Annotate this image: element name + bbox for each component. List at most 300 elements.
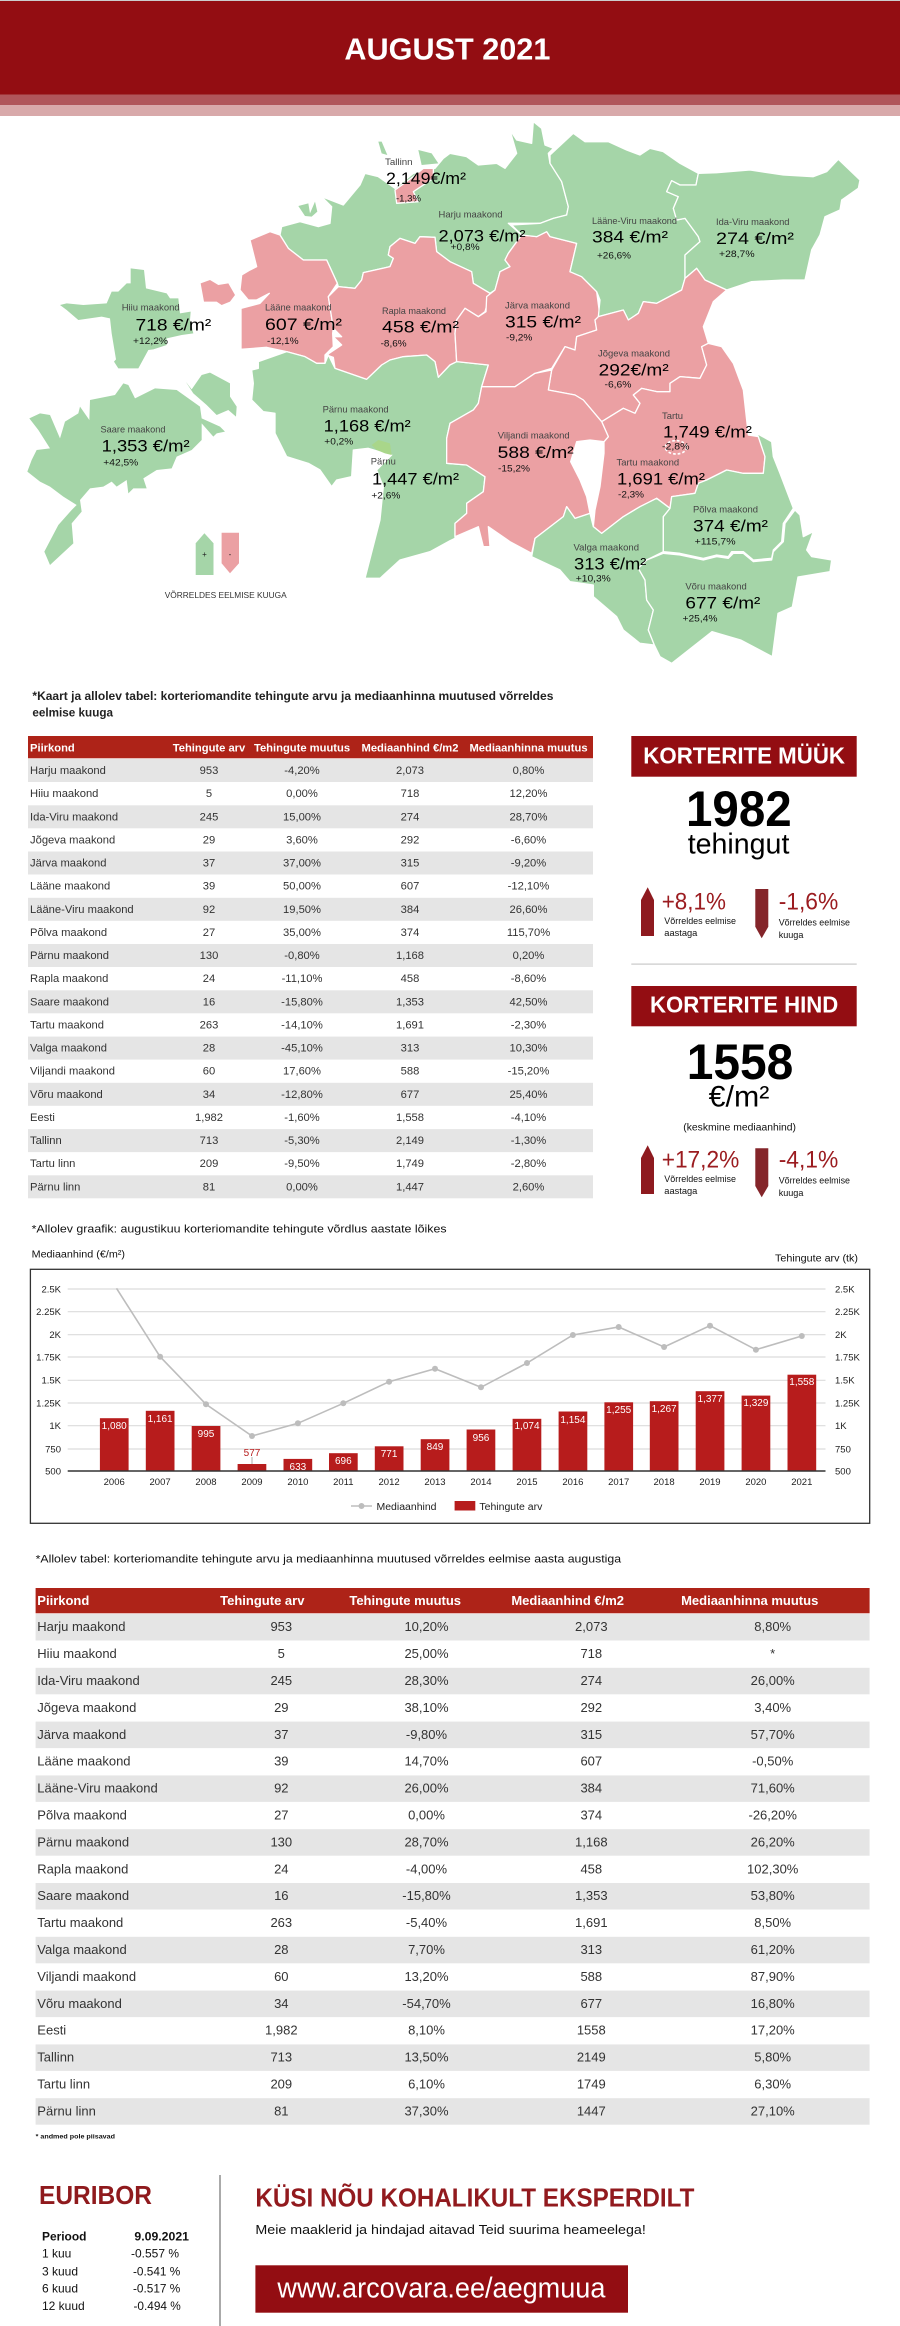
label: Tallinn xyxy=(385,157,466,205)
button: website xyxy=(255,2265,628,2313)
row: Harju: 2,073 xyxy=(575,1619,608,1634)
region: Tallinn xyxy=(395,168,433,203)
row: Rapla: 458 xyxy=(580,1861,602,1876)
row: Pärnu xyxy=(28,944,593,967)
chart legend: Tehingute arv xyxy=(479,1502,542,1513)
label: Põlva xyxy=(693,505,768,547)
table header: Mediaanhind €/m2 xyxy=(511,1593,624,1608)
region: Lääne maakond xyxy=(240,232,337,363)
row: Lääne-Viru: 71,60% xyxy=(751,1781,795,1796)
row: Hiiu: 718 xyxy=(580,1646,602,1661)
row: Järva xyxy=(28,852,593,874)
heading: korterite hind xyxy=(631,986,857,1026)
row: Ida-Viru: 245 xyxy=(270,1673,292,1688)
row: Viljandi xyxy=(37,1969,795,1984)
row: Tartu: 8,50% xyxy=(754,1915,792,1930)
table header: Tehingute arv xyxy=(220,1593,305,1608)
row: Tartu linn: 6,30% xyxy=(754,2076,792,2092)
row: Hiiu: 12,20% xyxy=(510,788,548,800)
label: Pärnu maakond xyxy=(323,404,411,447)
year labels: 2016 xyxy=(562,1477,583,1488)
row: Põlva: 374 xyxy=(401,927,419,939)
row: Tartu linn xyxy=(37,2076,792,2092)
row: Tartu: -2,30% xyxy=(511,1019,546,1031)
left axis labels: 2.25K xyxy=(36,1307,62,1318)
row: Võru: -54,70% xyxy=(402,1996,451,2011)
region: Tartu linn xyxy=(665,441,687,454)
bar value labels: 633 xyxy=(290,1462,307,1473)
right axis labels: 1.5K xyxy=(835,1376,855,1386)
row: Tallinn: Tallinn xyxy=(37,2050,74,2065)
row: Ida-Viru: 15,00% xyxy=(283,811,321,823)
euribor table xyxy=(42,2230,189,2313)
note: first table: *Kaart ja allolev tabel: korteriomandite tehingute arvu ja mediaanhinna muutused võrreldes xyxy=(32,691,553,703)
label: Pärnu: 1,447 €/m² xyxy=(372,469,459,488)
stat: month change: -1,6% xyxy=(779,888,838,915)
row: Lääne-Viru: 19,50% xyxy=(283,904,321,916)
right axis labels: 2.25K xyxy=(835,1307,860,1318)
heading: korterite müük: KORTERITE MÜÜK xyxy=(643,742,845,768)
row: Saare: -15,80% xyxy=(281,996,323,1008)
region: Pärnu linn xyxy=(372,440,392,455)
region: Põlva maakond xyxy=(663,433,793,560)
left axis labels: 1.25K xyxy=(36,1398,62,1410)
big number: price: (keskmine mediaanhind) xyxy=(683,1123,796,1134)
bar value labels: 1,080 xyxy=(102,1421,127,1432)
row: Rapla xyxy=(30,973,546,985)
row: Võru: Võru maakond xyxy=(30,1089,103,1101)
row: Viljandi: -15,20% xyxy=(508,1066,549,1078)
island: Aegna xyxy=(418,150,438,165)
year labels: 2015 xyxy=(516,1477,538,1488)
stat: month change: Võrreldes eelmise xyxy=(779,918,850,928)
row: Saare: 53,80% xyxy=(751,1888,795,1903)
label: Lääne-Viru xyxy=(592,216,677,261)
label: Pärnu: Pärnu xyxy=(371,457,396,468)
row: Harju: Harju maakond xyxy=(37,1619,125,1634)
row: Võru: Võru maakond xyxy=(37,1996,122,2011)
icon: up arrow xyxy=(641,887,654,936)
row: Valga: 61,20% xyxy=(751,1942,795,1957)
row: Tallinn: -5,30% xyxy=(284,1135,320,1147)
row: Eesti: -4,10% xyxy=(511,1112,546,1124)
label: Ida-Viru xyxy=(716,217,794,260)
row: Tartu: 263 xyxy=(200,1019,218,1031)
row: Jõgeva: Jõgeva maakond xyxy=(37,1700,136,1715)
row: Lääne: Lääne maakond xyxy=(30,881,110,893)
label: Järva: 315 €/m² xyxy=(505,312,581,331)
region: Lääne-Viru maakond xyxy=(512,133,700,320)
row: Tallinn xyxy=(28,1129,593,1152)
row: Lääne-Viru: 384 xyxy=(580,1781,602,1796)
row: Lääne: 50,00% xyxy=(283,881,321,893)
row: Harju: Harju maakond xyxy=(30,765,106,777)
row: Eesti xyxy=(37,2023,795,2038)
row: Lääne xyxy=(30,881,549,893)
row: Tartu linn xyxy=(30,1158,546,1170)
euribor table: 3 kuud xyxy=(42,2265,78,2279)
row: Ida-Viru xyxy=(36,1668,870,1694)
left axis labels: 1.5K xyxy=(41,1376,62,1386)
label: Põlva: +115,7% xyxy=(695,536,736,547)
label: Saare xyxy=(100,425,190,468)
row: Võru: 16,80% xyxy=(751,1996,795,2011)
bar value labels: 849 xyxy=(427,1442,444,1453)
label: Ida-Viru: Ida-Viru maakond xyxy=(716,217,790,228)
row: Viljandi: 17,60% xyxy=(283,1066,321,1078)
label: Pärnu maakond: 1,168 €/m² xyxy=(324,417,411,436)
row: Tartu xyxy=(30,1019,546,1031)
row: Tartu linn: 209 xyxy=(270,2076,292,2092)
year labels: 2021 xyxy=(791,1477,812,1488)
row: Harju: 8,80% xyxy=(754,1619,792,1634)
big number: price xyxy=(683,1034,796,1134)
row: Pärnu linn: 1,447 xyxy=(396,1181,424,1193)
row: Tartu: Tartu maakond xyxy=(37,1915,123,1930)
panel: apartment sales xyxy=(631,736,857,940)
row: Pärnu: 26,20% xyxy=(751,1834,795,1849)
label: Võru: Võru maakond xyxy=(685,581,747,592)
chart legend xyxy=(351,1501,542,1513)
label: Ida-Viru: 274 €/m² xyxy=(716,229,794,248)
row: Põlva: 0,00% xyxy=(408,1808,445,1822)
label: Harju xyxy=(438,210,526,253)
icon: down arrow xyxy=(755,889,768,938)
euribor table: 6 kuud xyxy=(42,2282,78,2296)
label: Hiiu: +12,2% xyxy=(133,336,169,347)
label: Jõgeva: -6,6% xyxy=(604,379,632,390)
label: Viljandi xyxy=(498,431,574,475)
row: Tallinn: Tallinn xyxy=(30,1135,62,1147)
row: Lääne: Lääne maakond xyxy=(37,1754,131,1769)
row: Saare: 16 xyxy=(203,996,215,1008)
icon: down arrow xyxy=(755,1148,768,1197)
bar value labels: 995 xyxy=(198,1429,215,1440)
row: Järva: 315 xyxy=(401,858,419,870)
bar value labels: 956 xyxy=(473,1433,490,1444)
label: Pärnu maakond: +0,2% xyxy=(324,436,354,447)
region: Pärnu maakond xyxy=(252,352,488,578)
row: Eesti: 8,10% xyxy=(408,2023,445,2038)
row: Pärnu: 130 xyxy=(200,950,218,962)
stat: month change: Võrreldes eelmise xyxy=(779,1176,850,1186)
stat: year change: Võrreldes eelmise xyxy=(664,916,736,926)
region: Võru maakond xyxy=(638,510,832,663)
label: Tartu: 1,749 €/m² xyxy=(663,422,752,441)
row: Põlva: 27 xyxy=(203,927,215,939)
row: Eesti: -1,60% xyxy=(284,1112,320,1124)
left axis labels: 500 xyxy=(45,1466,61,1478)
left axis labels: 1.75K xyxy=(36,1352,62,1364)
left axis labels xyxy=(36,1284,62,1478)
row: Lääne-Viru: Lääne-Viru maakond xyxy=(37,1781,158,1796)
row: Hiiu: Hiiu maakond xyxy=(37,1646,117,1661)
label: Tartu: -2,8% xyxy=(662,441,690,452)
row: Valga: 28 xyxy=(203,1043,215,1055)
row: Võru xyxy=(36,1991,870,2017)
big number: price: 1558 xyxy=(687,1034,793,1090)
line: mediaanhind xyxy=(116,1288,805,1439)
axis title: left: Mediaanhind (€/m²) xyxy=(32,1250,125,1261)
table header xyxy=(36,1588,870,1613)
island: Naissaar xyxy=(378,142,387,155)
label: Tartu maakond: Tartu maakond xyxy=(616,458,679,469)
row: Viljandi xyxy=(30,1066,549,1078)
label: Viljandi: -15,2% xyxy=(498,464,531,475)
row: Jõgeva: 29 xyxy=(274,1700,289,1715)
label: Tallinn: -1,3% xyxy=(396,194,422,205)
label: Tallinn: 2,149€/m² xyxy=(386,169,466,188)
table header: Piirkond xyxy=(30,742,75,754)
region: Jõgeva maakond xyxy=(548,268,727,422)
label: Hiiu: 718 €/m² xyxy=(136,316,212,335)
row: Lääne-Viru: 384 xyxy=(401,904,419,916)
label: Valga: +10,3% xyxy=(576,573,611,584)
row: Jõgeva: 3,60% xyxy=(286,834,318,846)
stat: month change xyxy=(779,888,850,940)
stat: month change xyxy=(779,1146,850,1198)
row: Ida-Viru: 28,30% xyxy=(404,1673,449,1688)
row: Põlva: -26,20% xyxy=(748,1808,797,1822)
label: Rapla: -8,6% xyxy=(381,339,407,350)
row: Pärnu xyxy=(36,1829,870,1856)
label: Põlva: 374 €/m² xyxy=(693,516,768,535)
label: Lääne-Viru: 384 €/m² xyxy=(592,228,668,247)
row: Pärnu: 28,70% xyxy=(404,1834,449,1849)
label: Rapla xyxy=(381,306,459,350)
row: Rapla: Rapla maakond xyxy=(30,973,108,985)
island: Muhu xyxy=(186,373,237,417)
row: Ida-Viru: Ida-Viru maakond xyxy=(30,811,118,823)
row: Saare: -15,80% xyxy=(402,1888,451,1903)
row: Lääne: -12,10% xyxy=(508,881,549,893)
label: Harju: 2,073 €/m² xyxy=(438,227,526,246)
big number: transactions xyxy=(686,781,792,860)
row: Jõgeva xyxy=(30,834,546,846)
bar value labels: 1,154 xyxy=(560,1415,586,1426)
row: Tartu linn: -9,50% xyxy=(284,1158,320,1170)
region: Järva maakond xyxy=(455,225,600,387)
label: Tartu xyxy=(662,411,752,452)
bars: tehingute arv xyxy=(100,1375,816,1471)
euribor table: 9.09.2021 xyxy=(134,2230,189,2244)
label: Lääne-Viru: Lääne-Viru maakond xyxy=(592,216,677,227)
heading: contact: KÜSI NÕU KOHALIKULT EKSPERDILT xyxy=(255,2183,694,2213)
label: Pärnu maakond: Pärnu maakond xyxy=(323,404,389,415)
label: Saare: Saare maakond xyxy=(100,425,166,436)
row: Tartu: -5,40% xyxy=(406,1915,448,1930)
row: Harju: 953 xyxy=(270,1619,292,1634)
row: Pärnu linn: 2,60% xyxy=(513,1181,544,1193)
right axis labels: 750 xyxy=(835,1444,851,1456)
icon: up arrow xyxy=(641,1145,654,1194)
stat: year change: +17,2% xyxy=(662,1146,739,1173)
label: Saare: +42,5% xyxy=(103,457,139,468)
row: Valga xyxy=(28,1037,593,1060)
label: Harju: Harju maakond xyxy=(438,210,502,221)
region: Valga maakond xyxy=(532,498,670,645)
euribor table: -0.494 % xyxy=(134,2299,181,2313)
row: Tartu: 263 xyxy=(270,1915,292,1930)
row: Põlva xyxy=(30,927,550,939)
year labels: 2007 xyxy=(150,1477,171,1488)
chart legend: Mediaanhind xyxy=(376,1502,436,1513)
label: Võru: 677 €/m² xyxy=(685,593,761,612)
big number: transactions: tehingut xyxy=(688,828,789,860)
bar value labels: 1,377 xyxy=(697,1394,723,1405)
label: Võru xyxy=(682,581,761,625)
row: Tartu: 1,691 xyxy=(575,1915,608,1930)
table header: Tehingute muutus xyxy=(254,742,350,754)
row: Saare: 16 xyxy=(274,1888,289,1903)
row: Harju: -4,20% xyxy=(284,765,320,777)
euribor table: -0.557 % xyxy=(131,2247,179,2261)
row: Saare: 1,353 xyxy=(575,1888,608,1903)
label: Tartu maakond xyxy=(616,458,705,501)
row: Valga: Valga maakond xyxy=(37,1942,127,1957)
left axis labels: 1K xyxy=(49,1421,62,1432)
row: Tallinn xyxy=(36,2044,870,2071)
row: Valga: 313 xyxy=(580,1942,602,1957)
label: Viljandi: 588 €/m² xyxy=(498,443,574,462)
row: Tallinn: 713 xyxy=(270,2050,292,2065)
row: Lääne: 607 xyxy=(580,1754,602,1769)
row: Viljandi: 13,20% xyxy=(404,1969,449,1984)
year labels: 2012 xyxy=(379,1477,400,1488)
row: Valga: 313 xyxy=(401,1043,419,1055)
row: Pärnu linn: Pärnu linn xyxy=(37,2103,96,2118)
heading: euribor: EURIBOR xyxy=(39,2180,152,2210)
row: Jõgeva: 292 xyxy=(401,834,419,846)
region: Saare maakond xyxy=(27,383,225,565)
map legend: - xyxy=(229,550,232,559)
label: Jõgeva: Jõgeva maakond xyxy=(598,349,670,360)
row: Pärnu linn: 81 xyxy=(203,1181,215,1193)
row: Lääne-Viru: 26,00% xyxy=(404,1781,449,1796)
heading: korterite hind: KORTERITE HIND xyxy=(650,992,838,1018)
year labels: 2017 xyxy=(608,1477,629,1488)
row: Rapla: Rapla maakond xyxy=(37,1861,128,1876)
row: Põlva: 115,70% xyxy=(507,927,550,939)
label: Hiiu xyxy=(122,303,212,347)
label: Tallinn: Tallinn xyxy=(385,157,413,168)
region: Viljandi maakond xyxy=(447,370,608,553)
row: Järva: Järva maakond xyxy=(37,1727,126,1742)
stat: month change: kuuga xyxy=(779,930,804,940)
axis title: right: Tehingute arv (tk) xyxy=(775,1254,858,1265)
row: Saare: 1,353 xyxy=(396,996,424,1008)
row: Ida-Viru: 28,70% xyxy=(510,811,548,823)
row: Põlva xyxy=(37,1808,797,1822)
contact text: Meie maaklerid ja hindajad aitavad Teid suurima heameelega! xyxy=(255,2222,646,2237)
region: Hiiu maakond xyxy=(60,268,193,368)
year labels: 2018 xyxy=(654,1477,675,1488)
label: Järva xyxy=(505,301,581,344)
right axis labels xyxy=(835,1284,860,1478)
row: Hiiu: 0,00% xyxy=(286,788,318,800)
row: Eesti: 1,982 xyxy=(195,1112,223,1124)
row: Tallinn: 13,50% xyxy=(404,2050,449,2065)
row: Järva: 37 xyxy=(274,1727,289,1742)
row: Jõgeva: 29 xyxy=(203,834,215,846)
euribor table: 1 kuu xyxy=(42,2247,71,2261)
row: Tartu linn: 209 xyxy=(200,1158,218,1170)
row: Valga: 7,70% xyxy=(408,1942,445,1957)
row: Viljandi: 60 xyxy=(203,1066,215,1078)
note: first table xyxy=(32,691,553,720)
right axis labels: 1.25K xyxy=(835,1398,860,1410)
bar value labels: 1,255 xyxy=(606,1405,632,1416)
row: Valga: 28 xyxy=(274,1942,289,1957)
row: Võru: 34 xyxy=(203,1089,215,1101)
label: Rapla: Rapla maakond xyxy=(382,306,446,317)
region: Ida-Viru maakond xyxy=(667,159,860,290)
row: Rapla xyxy=(37,1861,799,1876)
row: Tallinn: 713 xyxy=(200,1135,218,1147)
row: Põlva: Põlva maakond xyxy=(30,927,107,939)
label: Pärnu: +2,6% xyxy=(371,490,401,501)
label: Tartu maakond: -2,3% xyxy=(618,490,645,501)
row: Tallinn: -1,30% xyxy=(511,1135,546,1147)
row: Hiiu xyxy=(30,788,548,800)
row: Viljandi: Viljandi maakond xyxy=(30,1066,115,1078)
bar value labels: 1,074 xyxy=(514,1421,540,1432)
row: Lääne-Viru xyxy=(36,1775,870,1802)
row: Põlva: 27 xyxy=(274,1808,289,1822)
table header: Tehingute muutus xyxy=(349,1593,461,1608)
row: Hiiu: 718 xyxy=(401,788,419,800)
row: Võru: -12,80% xyxy=(281,1089,323,1101)
row: Harju xyxy=(36,1614,870,1640)
row: Lääne-Viru: 92 xyxy=(274,1781,289,1796)
heading: korterite müük xyxy=(631,736,857,777)
row: Saare xyxy=(28,990,593,1013)
right axis labels: 1.75K xyxy=(835,1352,860,1364)
islands: Pakri xyxy=(298,202,317,217)
stat: year change: aastaga xyxy=(664,1186,698,1196)
region: Harju maakond xyxy=(280,122,568,293)
row: Järva: 315 xyxy=(580,1727,602,1742)
label: Rapla: 458 €/m² xyxy=(382,318,459,337)
row: Ida-Viru: Ida-Viru maakond xyxy=(37,1673,140,1688)
row: Võru: 25,40% xyxy=(510,1089,548,1101)
bar value labels: 771 xyxy=(381,1449,398,1460)
row: Lääne xyxy=(37,1754,794,1769)
label: Harju: +0,8% xyxy=(451,242,480,253)
stat: month change: -4,1% xyxy=(779,1146,838,1173)
region: Rapla maakond xyxy=(327,237,490,379)
row: Eesti: 1,558 xyxy=(396,1112,424,1124)
left axis labels: 2.5K xyxy=(41,1284,62,1296)
row: Valga: Valga maakond xyxy=(30,1043,107,1055)
row: Pärnu: 1,168 xyxy=(575,1834,608,1849)
row: Tallinn: 2,149 xyxy=(396,1135,424,1147)
row: Põlva: Põlva maakond xyxy=(37,1808,127,1822)
euribor table: 12 kuud xyxy=(42,2299,85,2313)
row: Ida-Viru: 274 xyxy=(580,1673,602,1688)
label: Valga: 313 €/m² xyxy=(574,554,647,573)
label: Ida-Viru: +28,7% xyxy=(719,249,755,260)
label: Saare: 1,353 €/m² xyxy=(102,437,190,456)
row: Saare: Saare maakond xyxy=(37,1888,129,1903)
row: Võru: 677 xyxy=(401,1089,419,1101)
year labels: 2011 xyxy=(333,1477,354,1488)
bar value labels: 1,161 xyxy=(148,1414,173,1425)
row: Harju: 953 xyxy=(200,765,218,777)
row: Ida-Viru: 26,00% xyxy=(751,1673,795,1688)
label: Lääne: 607 €/m² xyxy=(265,315,342,334)
label: Tartu maakond: 1,691 €/m² xyxy=(617,469,705,488)
